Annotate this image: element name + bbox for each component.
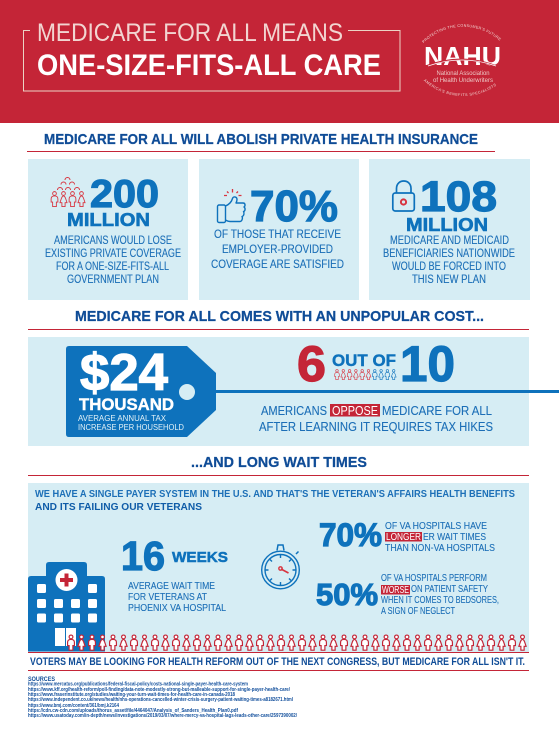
heading: unpopular cost: MEDICARE FOR ALL COMES WITH AN UNPOPULAR COST...: [75, 308, 484, 325]
stat 6 out of 10: 6: [297, 336, 326, 392]
NAHU logo: NAHU: [424, 41, 501, 71]
wait time caption: [128, 580, 226, 614]
description: [45, 235, 181, 286]
description: GOVERNMENT PLAN: [67, 274, 159, 286]
wait time caption: AVERAGE WAIT TIME: [128, 580, 215, 592]
sources: https://www.bmj.com/content/361/bmj.k2164: [28, 703, 119, 709]
sources: https://www.kff.org/health-reform/poll-finding/data-note-modestly-strong-but-malleable-support-for-single-payer-health-care/: [28, 687, 291, 693]
price tag: [66, 344, 216, 437]
stat 70%: 70%: [250, 182, 338, 231]
stat 70% longer waits: OF VA HOSPITALS HAVE: [385, 520, 487, 532]
stat 50% worse safety: A SIGN OF NEGLECT: [381, 605, 455, 617]
stat 200: 200: [90, 173, 159, 216]
stat 70% longer waits: [319, 517, 495, 554]
sources: https://cdn.cw-cdn.com/uploads/thorus_asset/file/4464047/Analysis_of_Sanders_Health_Plan0.pdf: [28, 708, 238, 714]
description: EXISTING PRIVATE COVERAGE: [45, 248, 181, 260]
NAHU logo: AMERICA'S BENEFITS SPECIALISTS: [424, 79, 496, 96]
sources: SOURCES: [28, 676, 56, 683]
tag unit: THOUSAND: [79, 396, 174, 414]
tag caption: INCREASE PER HOUSEHOLD: [78, 423, 184, 432]
stat 50% worse safety: WORSE: [382, 584, 409, 596]
row of people: [68, 635, 526, 650]
description: [383, 235, 515, 286]
stat 70% longer waits: THAN NON-VA HOSPITALS: [385, 542, 495, 554]
stat 70% longer waits: ER WAIT TIMES: [423, 531, 486, 543]
NAHU logo: PROTECTING THE CONSUMER'S FUTURE: [422, 24, 502, 43]
icon: thumbs up: [218, 189, 245, 222]
description: EMPLOYER-PROVIDED: [222, 244, 333, 256]
oppose statement: [259, 403, 493, 434]
stat 6 out of 10: [297, 336, 455, 392]
stat 16 weeks: 16: [121, 533, 165, 579]
tag caption: AVERAGE ANNUAL TAX: [78, 414, 167, 423]
oppose statement: MEDICARE FOR ALL: [382, 403, 492, 418]
stat 16 weeks: WEEKS: [172, 549, 228, 566]
wait time caption: FOR VETERANS AT: [128, 591, 207, 603]
icon: ten people: [335, 370, 396, 380]
sources: https://www.fraserinstitute.org/studies/waiting-your-turn-wait-times-for-health-care-in-canada-2018: [28, 692, 235, 698]
sources: [28, 676, 298, 719]
description: THIS NEW PLAN: [412, 274, 486, 286]
stat label MILLION: MILLION: [67, 210, 150, 230]
tag caption: [78, 414, 184, 432]
oppose statement: AFTER LEARNING IT REQUIRES TAX HIKES: [259, 419, 493, 434]
icon: hospital: [28, 562, 105, 652]
intro text: AND ITS FAILING OUR VETERANS: [35, 501, 202, 513]
stat label MILLION: MILLION: [406, 215, 488, 235]
sources: https://www.mercatus.org/publications/federal-fiscal-policy/costs-national-single-payer-health-care-system: [28, 682, 248, 688]
NAHU logo: [422, 24, 502, 96]
description: MEDICARE AND MEDICAID: [390, 235, 509, 247]
stat 50% worse safety: WHEN IT COMES TO BEDSORES,: [381, 594, 499, 606]
oppose statement: OPPOSE: [332, 403, 378, 418]
icon: stopwatch: [262, 545, 299, 589]
title frame: [24, 30, 400, 91]
description: AMERICANS WOULD LOSE: [54, 235, 172, 247]
stat 50% worse safety: ON PATIENT SAFETY: [411, 583, 488, 595]
header banner: [0, 0, 559, 123]
stat 108: 108: [420, 173, 497, 221]
title line 1: MEDICARE FOR ALL MEANS: [37, 19, 343, 47]
stat 50% worse safety: 50%: [316, 577, 378, 612]
price tag string: [214, 390, 559, 393]
description: [211, 229, 344, 271]
panel: veterans wait times: [28, 483, 529, 652]
oppose statement: AMERICANS: [261, 403, 327, 418]
icon: crowd of people: [51, 178, 85, 207]
stat 70% longer waits: LONGER: [386, 531, 421, 543]
sources: https://www.usatoday.com/in-depth/news/investigations/2019/03/07/where-mercy-va-hospital-lags-leads-other-care/2597390002/: [28, 713, 298, 719]
stat 50% worse safety: [316, 572, 499, 617]
stat 16 weeks: [121, 533, 228, 579]
heading: abolish private insurance: MEDICARE FOR ALL WILL ABOLISH PRIVATE HEALTH INSURANCE: [44, 131, 478, 148]
sources: https://www.independent.co.uk/news/health/nhs-operations-cancelled-winter-crisis-surgery-patient-waiting-times-a8182671.html: [28, 697, 294, 703]
intro text: [35, 488, 515, 513]
icon: padlock: [393, 181, 414, 211]
stat 70% longer waits: 70%: [319, 517, 382, 553]
wait time caption: PHOENIX VA HOSPITAL: [128, 602, 226, 614]
description: OF THOSE THAT RECEIVE: [214, 229, 341, 241]
description: BENEFICIARIES NATIONWIDE: [383, 248, 515, 260]
title line 2: ONE-SIZE-FITS-ALL CARE: [37, 49, 381, 82]
description: FOR A ONE-SIZE-FITS-ALL: [56, 261, 169, 273]
heading: long wait times: ...AND LONG WAIT TIMES: [191, 454, 367, 471]
stat 6 out of 10: 10: [400, 336, 455, 392]
NAHU logo: of Health Underwriters: [433, 78, 493, 84]
stat 6 out of 10: OUT OF: [332, 352, 396, 370]
panel: 70 percent satisfied: [199, 159, 359, 300]
NAHU logo: National Association: [436, 71, 490, 77]
panel: tax cost: [28, 336, 559, 446]
stat 50% worse safety: OF VA HOSPITALS PERFORM: [381, 572, 487, 584]
panel: 108 million: [369, 159, 530, 300]
panel: 200 million: [28, 159, 188, 300]
description: COVERAGE ARE SATISFIED: [211, 259, 344, 271]
description: WOULD BE FORCED INTO: [392, 261, 506, 273]
tag amount: $24: [80, 344, 168, 402]
